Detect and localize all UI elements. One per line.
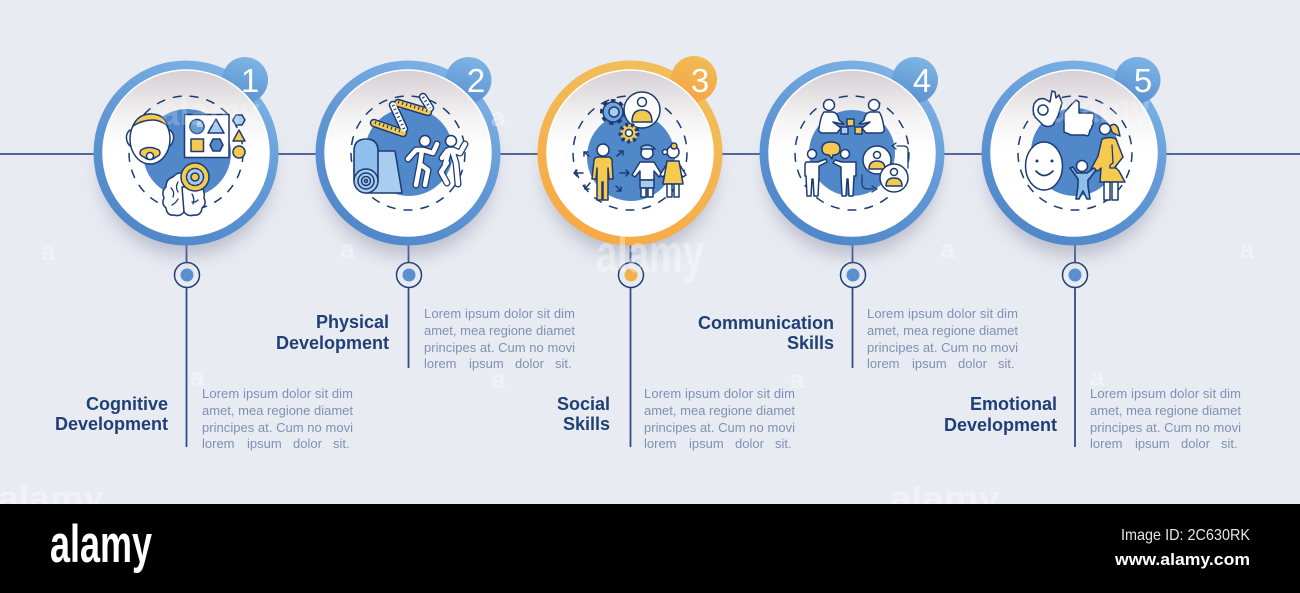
description 2: ipsum — [469, 356, 504, 371]
description 3: lorem — [644, 436, 677, 451]
step 4: communication skills — [698, 57, 1018, 371]
title: communication skills: Skills — [787, 333, 834, 353]
icon: gestures, smiley, mother and child — [1018, 91, 1132, 210]
title: communication skills: Communication — [698, 313, 834, 333]
description 5: sit. — [1221, 436, 1238, 451]
watermarks: a — [190, 362, 205, 392]
icon: yoga mat, tape and runners — [351, 96, 465, 210]
badge and ring 1 — [94, 57, 278, 256]
icon: people, gears and arrows — [573, 92, 687, 210]
number 4: 4 — [913, 62, 931, 99]
number 1: 1 — [241, 62, 259, 99]
badge and ring 4 — [760, 57, 944, 256]
description 1: sit. — [333, 436, 350, 451]
watermarks: a — [1240, 234, 1255, 264]
number 5: 5 — [1134, 62, 1152, 99]
icon: children, speech and avatars — [795, 96, 909, 210]
website: www.alamy.com — [1114, 550, 1250, 569]
title: physical development: Development — [276, 333, 389, 353]
description 2: sit. — [555, 356, 572, 371]
icon: baby, shapes and brain — [126, 96, 245, 216]
description 2: Lorem ipsum dolor sit dim — [424, 306, 575, 321]
watermarks — [0, 87, 1255, 516]
description 3: Lorem ipsum dolor sit dim — [644, 386, 795, 401]
description 1: lorem — [202, 436, 235, 451]
title: social skills: Skills — [563, 414, 610, 434]
description 1: dolor — [293, 436, 323, 451]
description 3: principes at. Cum no movi — [644, 420, 795, 435]
description 5: ipsum — [1135, 436, 1170, 451]
timeline horizontal line — [0, 153, 1300, 155]
description 4: Lorem ipsum dolor sit dim — [867, 306, 1018, 321]
watermarks: a — [790, 364, 805, 394]
description 4: lorem — [867, 356, 900, 371]
description 4: dolor — [958, 356, 988, 371]
description 3: amet, mea regione diamet — [644, 403, 795, 418]
step 5: emotional development — [944, 57, 1241, 451]
step 3: social skills — [538, 56, 795, 451]
number 3: 3 — [691, 62, 709, 99]
description 2: dolor — [515, 356, 545, 371]
image id: Image ID: 2C630RK — [1121, 527, 1250, 544]
step 2: physical development — [276, 57, 575, 371]
description 5: amet, mea regione diamet — [1090, 403, 1241, 418]
number 2: 2 — [467, 62, 485, 99]
description 3: sit. — [775, 436, 792, 451]
description 5: Lorem ipsum dolor sit dim — [1090, 386, 1241, 401]
connector and node 4 — [840, 240, 866, 368]
description 5: principes at. Cum no movi — [1090, 420, 1241, 435]
title: social skills: Social — [557, 394, 610, 414]
description 1: Lorem ipsum dolor sit dim — [202, 386, 353, 401]
description 4: ipsum — [912, 356, 947, 371]
connector and node 3 — [618, 240, 644, 447]
description 4: sit. — [998, 356, 1015, 371]
title: cognitive development: Development — [55, 414, 168, 434]
description 3: dolor — [735, 436, 765, 451]
title: emotional development: Development — [944, 415, 1057, 435]
description 4: amet, mea regione diamet — [867, 323, 1018, 338]
step 1: cognitive development — [55, 57, 353, 451]
watermarks: a — [491, 364, 506, 394]
watermarks: a — [940, 234, 955, 264]
watermarks: alamy — [0, 480, 104, 516]
description 2: lorem — [424, 356, 457, 371]
watermarks: alamy — [160, 90, 261, 134]
watermarks: a — [491, 102, 506, 132]
description 2: amet, mea regione diamet — [424, 323, 575, 338]
watermarks: alamy — [1050, 87, 1151, 131]
watermarks: a — [1090, 362, 1105, 392]
watermarks: a — [41, 236, 56, 266]
watermarks: alamy — [890, 480, 1000, 516]
badge and ring 5 — [982, 57, 1166, 256]
footer bar — [0, 504, 1300, 593]
description 5: lorem — [1090, 436, 1123, 451]
badge and ring 3 — [538, 56, 722, 256]
title: cognitive development: Cognitive — [86, 394, 168, 414]
connector and node 2 — [396, 240, 422, 368]
title: emotional development: Emotional — [970, 394, 1057, 414]
footer logo: alamy — [50, 515, 152, 574]
description 3: ipsum — [689, 436, 724, 451]
title: physical development: Physical — [316, 312, 389, 332]
badge and ring 2 — [316, 57, 500, 256]
description 2: principes at. Cum no movi — [424, 340, 575, 355]
connector and node 5 — [1062, 240, 1088, 447]
watermarks: alamy — [596, 224, 704, 284]
description 4: principes at. Cum no movi — [867, 340, 1018, 355]
connector and node 1 — [174, 240, 200, 447]
description 1: ipsum — [247, 436, 282, 451]
description 1: amet, mea regione diamet — [202, 403, 353, 418]
description 1: principes at. Cum no movi — [202, 420, 353, 435]
description 5: dolor — [1181, 436, 1211, 451]
watermarks: a — [340, 234, 355, 264]
